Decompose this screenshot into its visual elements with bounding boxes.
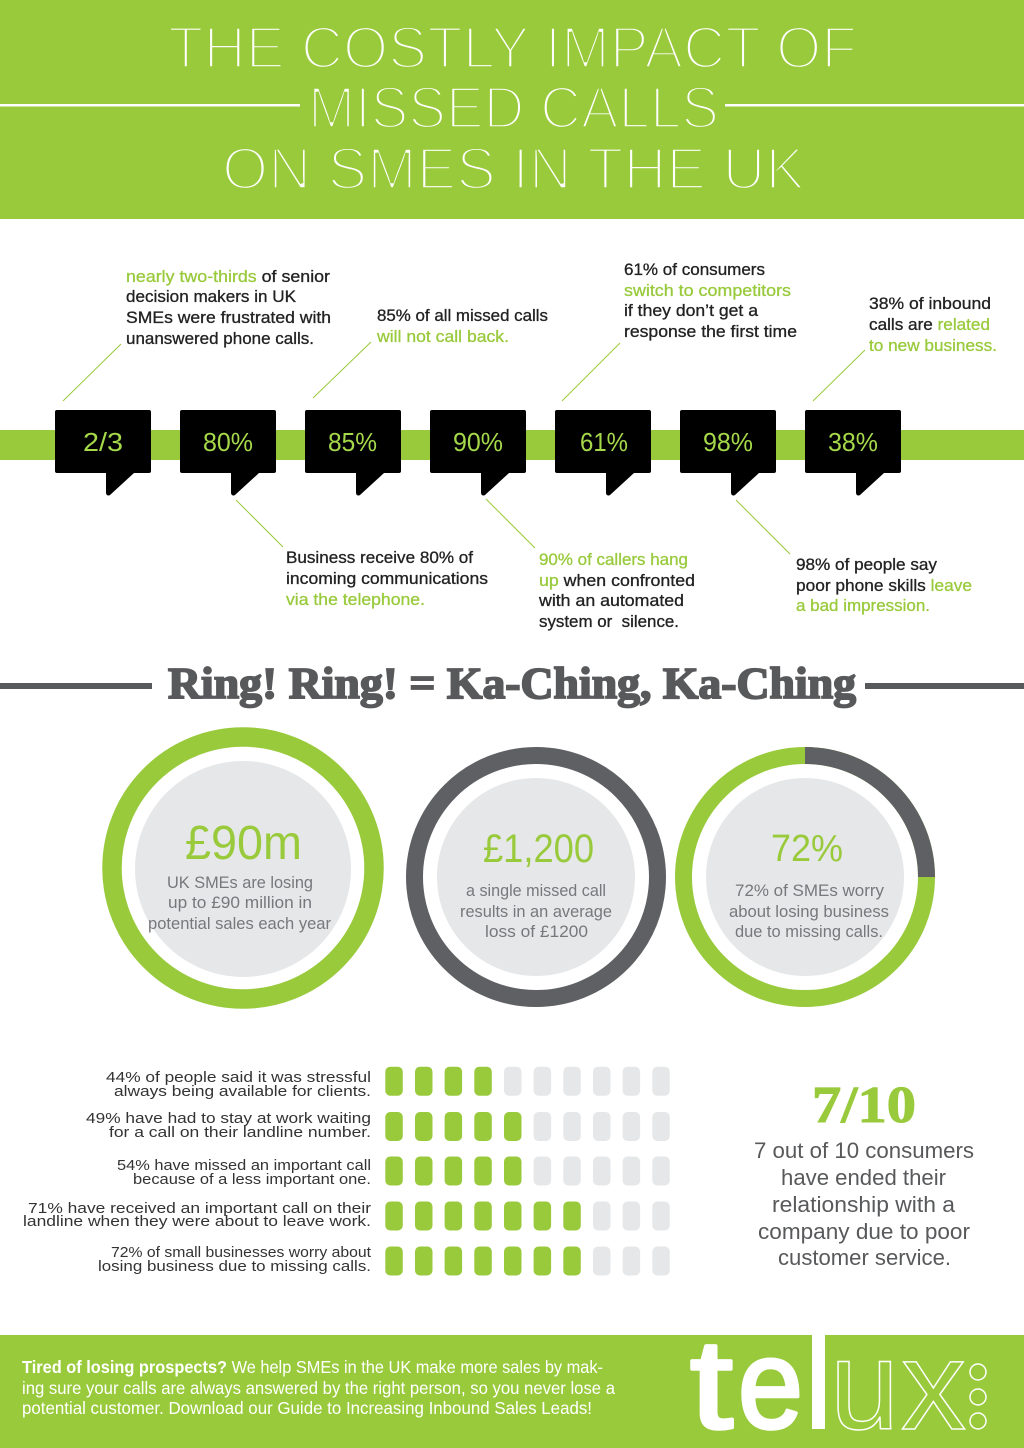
section heading: Ring! Ring! = Ka-Ching, Ka-Ching bbox=[168, 659, 856, 708]
callout: 90%: up when confronted bbox=[539, 572, 695, 590]
speech bubble: 2/3: 2/3 bbox=[83, 427, 123, 457]
speech bubble: 98%: 98% bbox=[703, 427, 753, 457]
callout: 38%: calls are related bbox=[869, 316, 990, 334]
callout: 98% bbox=[796, 556, 972, 615]
7/10 stat: 7 out of 10 consumers bbox=[754, 1138, 974, 1163]
speech bubble: 90% bbox=[430, 410, 526, 495]
callout: 98%: poor phone skills leave bbox=[796, 577, 972, 595]
pictogram row: 44%: always being available for clients. bbox=[114, 1084, 371, 1100]
speech bubble: 61% bbox=[555, 410, 651, 495]
callout: 61%: 61% of consumers bbox=[624, 261, 765, 279]
leader lines bbox=[63, 342, 865, 554]
callout: two-thirds: decision makers in UK bbox=[126, 288, 296, 306]
footer text: ing sure your calls are always answered by the right person, so you never lose a bbox=[22, 1378, 615, 1398]
pictogram row: 54%: 54% have missed an important call bbox=[117, 1158, 371, 1174]
callout: 80%: incoming communications bbox=[286, 570, 488, 588]
speech bubble: 2/3 bbox=[55, 410, 151, 496]
stat circle: 72% bbox=[684, 756, 926, 998]
speech bubble: 90%: 90% bbox=[453, 427, 503, 457]
7/10 stat: customer service. bbox=[778, 1245, 951, 1270]
footer banner bbox=[0, 1335, 1024, 1448]
7/10 stat: 7/10 bbox=[812, 1077, 916, 1134]
callout: 61% bbox=[624, 261, 797, 341]
callout: 61%: response the first time bbox=[624, 323, 797, 341]
callout: 98%: 98% of people say bbox=[796, 556, 938, 574]
callout: 61%: if they don’t get a bbox=[624, 302, 759, 320]
header banner bbox=[0, 0, 1024, 219]
7/10 stat: relationship with a bbox=[772, 1192, 956, 1217]
stat circle: £90m: UK SMEs are losing bbox=[167, 873, 313, 892]
pictogram row: 72%: 72% of small businesses worry about bbox=[111, 1245, 371, 1261]
callout: 80%: Business receive 80% of bbox=[286, 549, 473, 567]
callout: 38% bbox=[869, 295, 997, 355]
speech bubble: 85%: 85% bbox=[328, 427, 377, 457]
stat circle: 72%: due to missing calls. bbox=[735, 922, 883, 941]
stat circle: 72%: 72% bbox=[771, 828, 843, 870]
callout: 98%: a bad impression. bbox=[796, 597, 930, 615]
pictogram row: 49% bbox=[86, 1111, 670, 1141]
callout: 90%: 90% of callers hang bbox=[539, 551, 688, 569]
stat circle: £1,200: a single missed call bbox=[466, 881, 606, 900]
pictogram row: 71% bbox=[23, 1201, 670, 1230]
pictogram row: 72% bbox=[98, 1245, 670, 1276]
pictogram row: 49%: for a call on their landline number. bbox=[109, 1125, 371, 1141]
stat circle: £1,200 bbox=[414, 756, 658, 998]
speech bubble: 98% bbox=[680, 410, 776, 496]
stat circle: £1,200: results in an average bbox=[460, 902, 612, 921]
title: MISSED CALLS bbox=[308, 75, 719, 141]
footer text bbox=[22, 1357, 615, 1418]
speech bubble: 85% bbox=[305, 410, 401, 495]
7/10 stat: company due to poor bbox=[758, 1219, 970, 1244]
pictogram row: 44%: 44% of people said it was stressful bbox=[106, 1070, 371, 1086]
pictogram row: 49%: 49% have had to stay at work waiting bbox=[86, 1111, 371, 1127]
callout: 90% bbox=[538, 551, 695, 631]
speech bubble: 80% bbox=[180, 410, 276, 496]
pictogram row: 54% bbox=[117, 1156, 670, 1188]
callout: 85%: will not call back. bbox=[376, 328, 509, 346]
callout: two-thirds: SMEs were frustrated with bbox=[126, 309, 331, 327]
callout: 61%: switch to competitors bbox=[624, 282, 791, 300]
callout: two-thirds: nearly two-thirds of senior bbox=[126, 268, 331, 286]
stat circle: 72%: 72% of SMEs worry bbox=[735, 881, 884, 900]
title: ON SMES IN THE UK bbox=[222, 136, 805, 202]
callout: 38%: to new business. bbox=[869, 337, 997, 355]
footer text: potential customer. Download our Guide to Increasing Inbound Sales Leads! bbox=[22, 1398, 592, 1418]
callout: 38%: 38% of inbound bbox=[869, 295, 991, 313]
stat circle: £90m bbox=[112, 737, 374, 999]
pictogram row: 54%: because of a less important one. bbox=[133, 1172, 371, 1188]
stat circle: £90m: potential sales each year bbox=[148, 914, 331, 933]
telux logo bbox=[690, 1313, 986, 1448]
stat circle: £90m: £90m bbox=[185, 817, 302, 870]
callout: two-thirds bbox=[126, 268, 331, 348]
speech bubble: 80%: 80% bbox=[203, 427, 253, 457]
timeline band bbox=[0, 430, 1024, 460]
speech bubble: 38%: 38% bbox=[828, 427, 878, 457]
speech bubble: 61%: 61% bbox=[580, 427, 628, 457]
stat circle: 72%: about losing business bbox=[729, 902, 889, 921]
callout: 90%: system or silence. bbox=[539, 613, 679, 631]
stat circle: £90m: up to £90 million in bbox=[168, 893, 312, 912]
footer text: Tired of losing prospects? We help SMEs in the UK make more sales by mak- bbox=[22, 1357, 603, 1377]
pictogram row: 44% bbox=[106, 1067, 670, 1100]
stat circle: £1,200: £1,200 bbox=[483, 827, 594, 871]
callout: 80% bbox=[286, 549, 488, 609]
callout: 80%: via the telephone. bbox=[286, 591, 425, 609]
speech bubble: 38% bbox=[805, 410, 901, 496]
callout: 85% bbox=[376, 307, 548, 346]
7/10 stat: have ended their bbox=[781, 1165, 946, 1190]
pictogram row: 72%: losing business due to missing calls. bbox=[98, 1259, 371, 1275]
stat circle: £1,200: loss of £1200 bbox=[485, 922, 588, 941]
callout: 85%: 85% of all missed calls bbox=[377, 307, 548, 325]
pictogram row: 71%: 71% have received an important call on their bbox=[28, 1201, 371, 1217]
title bbox=[168, 15, 857, 202]
7/10 stat bbox=[754, 1077, 974, 1270]
callout: two-thirds: unanswered phone calls. bbox=[126, 330, 314, 348]
pictogram row: 71%: landline when they were about to leave work. bbox=[23, 1214, 371, 1230]
title: THE COSTLY IMPACT OF bbox=[168, 15, 857, 81]
callout: 90%: with an automated bbox=[538, 592, 684, 610]
section heading bbox=[0, 659, 1024, 708]
